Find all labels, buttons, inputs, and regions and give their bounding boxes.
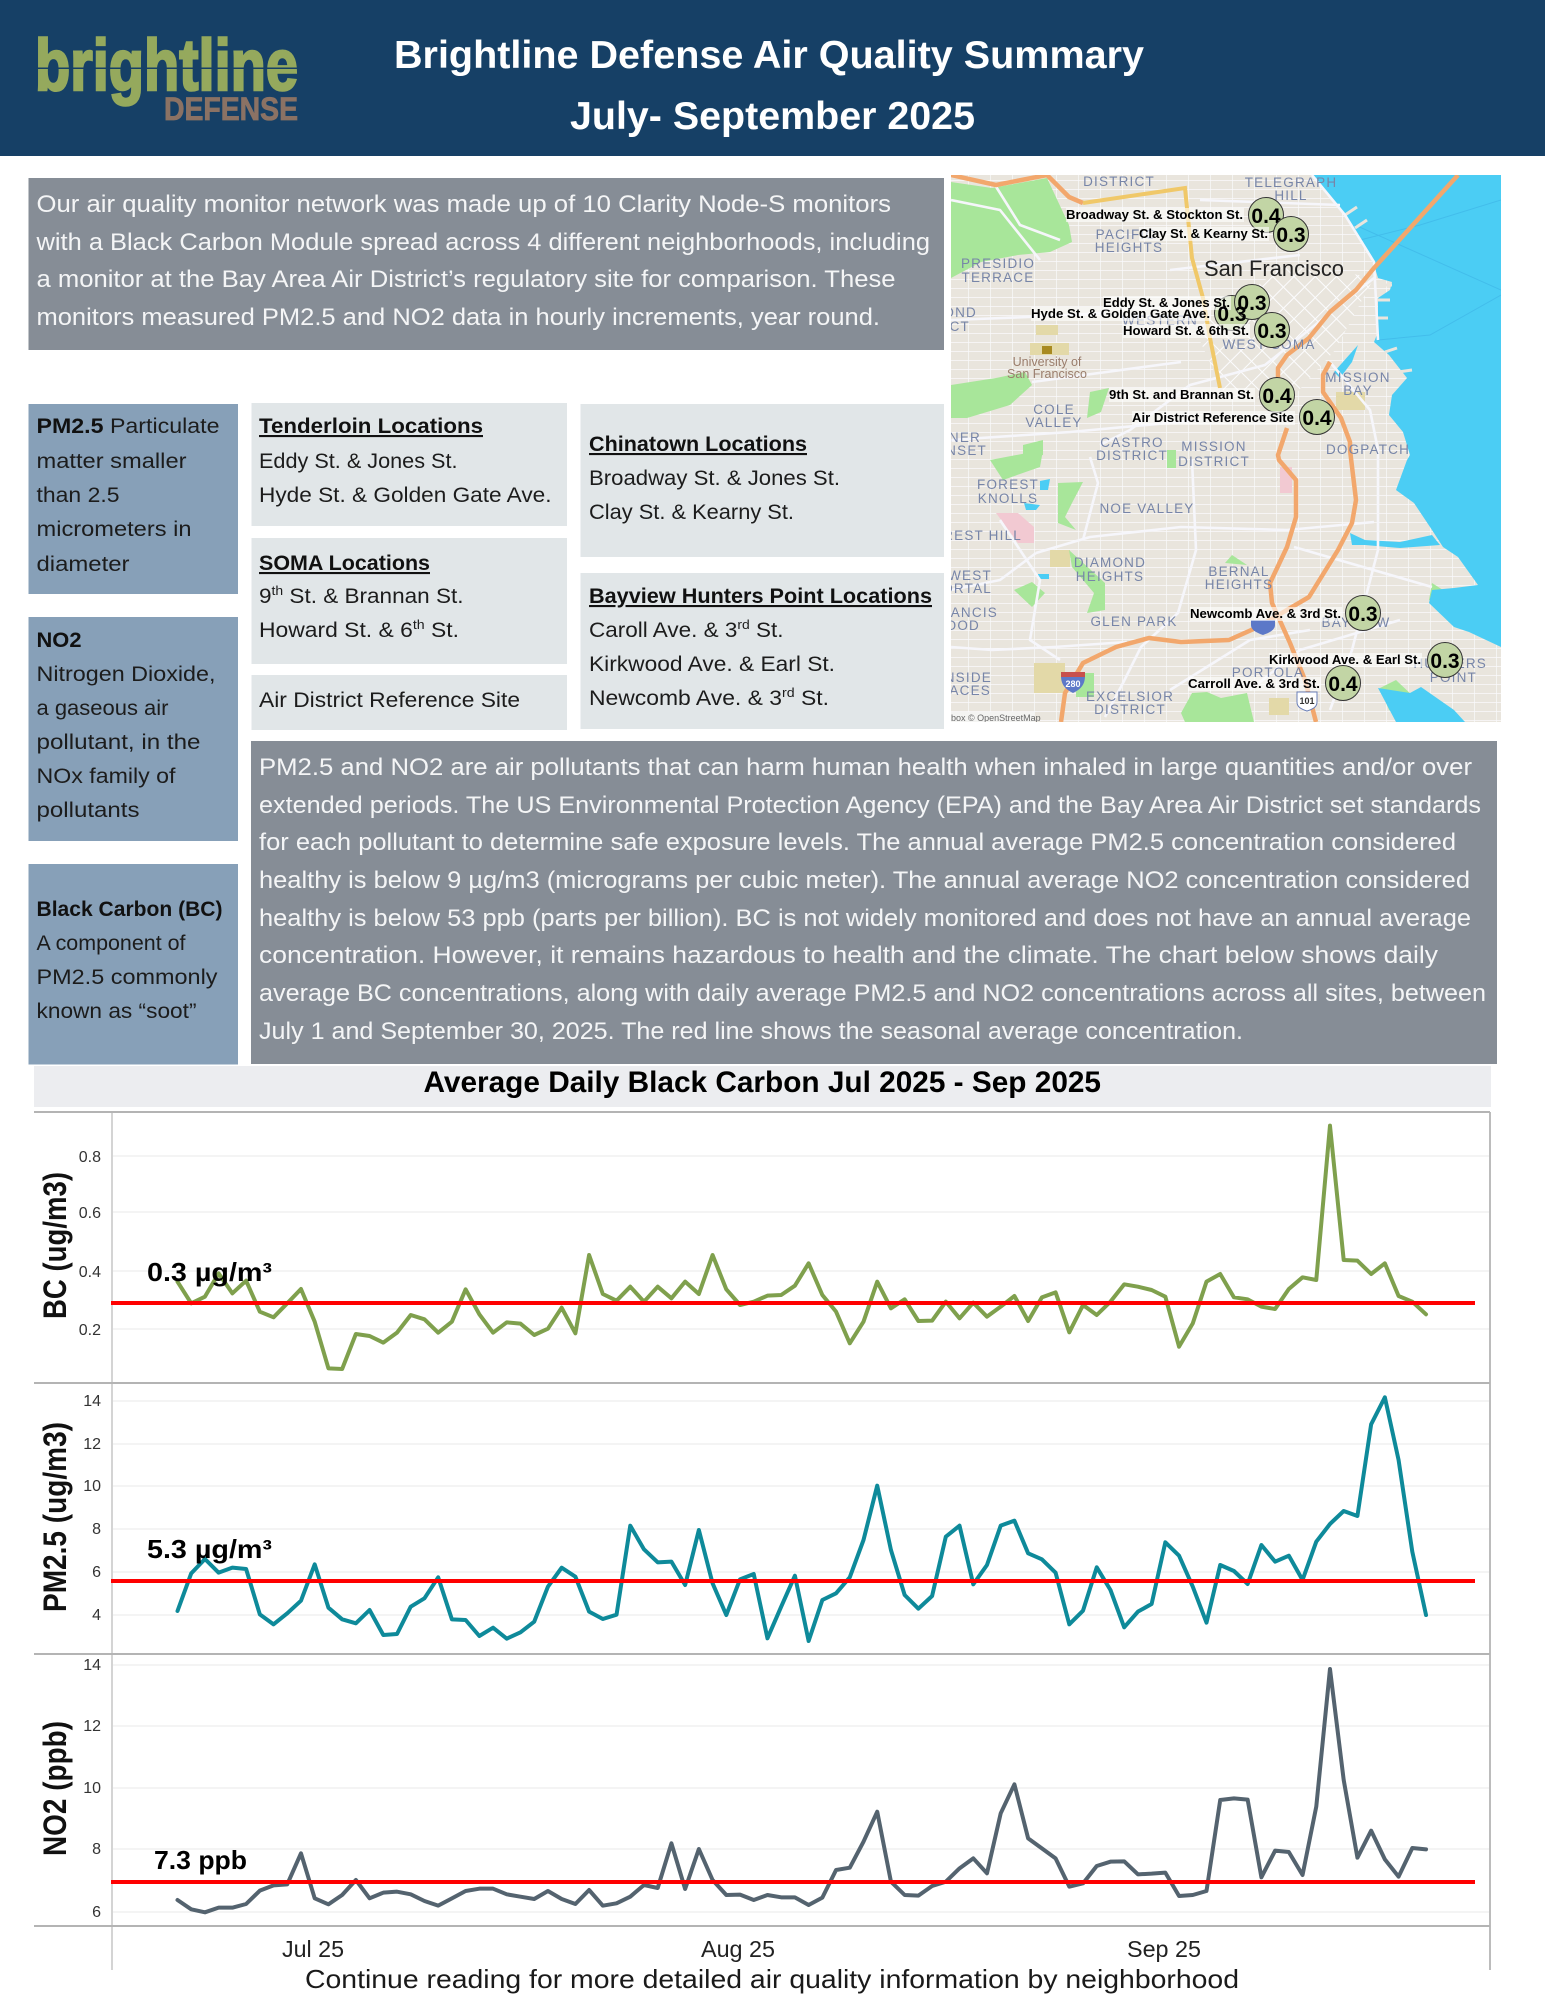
map neighborhood names: PORTOLA [1232,665,1304,680]
map neighborhood names: DISTRICT [1178,454,1250,469]
logo: brightline defense: DEFENSE [164,91,298,127]
panel: Black Carbon definition: A component of [36,932,186,955]
panel: PM2.5 definition: diameter [36,553,130,576]
line chart: black carbon [37,1126,1489,1369]
map neighborhood names: TERRACE [962,270,1034,285]
map marker: Newcomb Ave. & 3rd St.: Newcomb Ave. & 3rd St. [1190,606,1341,621]
axis title: BC: BC (ug/m3) [37,1172,73,1319]
panel: network intro: a monitor at the Bay Area Air District’s regulatory site for comparison. These [36,266,895,293]
panel: Bayview Hunters Point locations: Newcomb Ave. & 3 [589,687,766,710]
average line: PM2.5 [111,1579,1475,1583]
panel: Bayview Hunters Point locations: St. [750,619,784,642]
map neighborhood names: TERRACES [908,683,991,698]
panel: NO2 definition [28,617,238,841]
map marker: Kirkwood Ave. & Earl St.: Kirkwood Ave. & Earl St. [1269,652,1421,667]
panel: PM2.5 definition: PM2.5 Particulate [36,415,220,438]
footer note: Continue reading for more detailed air quality information by neighborhood [305,1964,1239,1994]
map neighborhood names: HILL [1274,188,1308,203]
panel: Bayview Hunters Point locations: Kirkwood Ave. & Earl St. [589,653,835,676]
panel: Black Carbon definition: known as “soot” [36,1000,197,1023]
map neighborhood names: FOREST [977,477,1039,492]
map neighborhood names: BERNAL [1208,564,1270,579]
map value: Hyde St. & Golden Gate Ave.: 0.3 [1217,303,1247,326]
line chart: NO2: 8 [92,1841,101,1858]
logo: brightline defense [35,26,298,127]
panel: network intro: Our air quality monitor network was made up of 10 Clarity Node-S monitors [36,191,891,218]
map neighborhood names: DOGPATCH [1326,442,1410,457]
map neighborhood names: SAINT FRANCIS [880,605,998,620]
title: Brightline Defense Air Quality Summary [394,34,1144,77]
panel: Tenderloin locations [252,403,567,526]
line chart: PM2.5: 12 [83,1436,101,1453]
map neighborhood names: WEST SOMA [1222,337,1316,352]
line chart: PM2.5: 10 [83,1478,101,1495]
x axis labels [282,1936,1201,1962]
map marker: 9th St. and Brannan St. [1109,378,1294,412]
panel: pollutant standards explanation: healthy is below 9 µg/m3 (micrograms per cubic meter). The annual average NO2 concentration considered [259,867,1470,894]
icon: highway shields [1061,620,1317,711]
panel: network intro [28,178,944,350]
panel: pollutant standards explanation: PM2.5 and NO2 are air pollutants that can harm human health when inhaled in large quantities and/or over [259,754,1472,781]
map neighborhood names: EXCELSIOR [1086,689,1174,704]
line chart: black carbon: 0.8 [79,1149,101,1166]
map neighborhood names: CASTRO [1100,435,1164,450]
average line: BC [111,1301,1475,1305]
map marker: Air District Reference Site [1132,400,1334,434]
map neighborhood names: SUNSET [925,443,987,458]
panel: Black Carbon definition: Black Carbon (BC) [36,898,222,921]
line chart: PM2.5 [37,1393,1489,1641]
panel: Black Carbon definition: PM2.5 commonly [36,966,218,989]
panel: NO2 definition: pollutants [36,799,140,822]
map neighborhood names: DIAMOND [1074,555,1146,570]
map marker: Carroll Ave. & 3rd St.: 0.4 [1328,673,1358,696]
panel: Air District reference site: Air District Reference Site [259,689,520,712]
map marker: Hyde St. & Golden Gate Ave. [1031,296,1250,330]
panel: Chinatown locations [580,404,944,557]
line chart: PM2.5: 6 [92,1564,101,1581]
panel: PM2.5 definition: micrometers in [36,518,192,541]
line chart: PM2.5: 4 [92,1607,101,1624]
map attribution: box © OpenStreetMap [951,713,1041,723]
map neighborhood names: DISTRICT [898,319,970,334]
map marker: Eddy St. & Jones St. [1103,284,1270,320]
panel: pollutant standards explanation: July 1 and September 30, 2025. The red line shows the seasonal average concentration. [259,1018,1243,1045]
panel: Bayview Hunters Point locations: rd [782,685,795,700]
map marker: Broadway St. & Stockton St.: 0.4 [1251,205,1281,228]
map neighborhood names: San Francisco [1204,256,1344,281]
x axis labels: Jul 25 [282,1936,344,1962]
title: July- September 2025 [570,95,975,138]
panel: Bayview Hunters Point locations: rd [737,617,750,632]
panel: Tenderloin locations: Eddy St. & Jones St. [259,450,458,473]
map marker: Howard St. & 6th St.: 0.3 [1257,320,1287,343]
map marker: Clay St. & Kearny St.: 0.3 [1276,224,1306,247]
map marker: Newcomb Ave. & 3rd St.: 0.3 [1348,603,1378,626]
panel: network intro: with a Black Carbon Module spread across 4 different neighborhoods, including [35,229,930,256]
map neighborhood names: RICHMOND [893,305,977,320]
panel: Air District reference site [252,675,567,730]
map of monitor sites [951,175,1501,722]
map neighborhood names: NOE VALLEY [1099,501,1195,516]
panel: Chinatown locations: Clay St. & Kearny St. [589,501,794,524]
panel: SOMA locations: th [413,617,425,632]
panel: network intro: monitors measured PM2.5 and NO2 data in hourly increments, year round. [36,304,880,331]
panel: Chinatown locations: Broadway St. & Jones St. [589,467,840,490]
data line: PM2.5 daily average [178,1397,1426,1641]
map neighborhood names: GLEN PARK [1090,614,1178,629]
map neighborhood names: OCEANSIDE [902,670,992,685]
map marker: Howard St. & 6th St. [1123,312,1290,348]
line chart: NO2: 12 [83,1718,101,1735]
chart title [34,1066,1491,1107]
panel: Black Carbon definition [28,864,238,1064]
map neighborhood names: PORTAL [932,581,992,596]
icon: highway shields: 280 [1065,679,1081,689]
chart frame [34,1112,1490,1970]
map neighborhood names: DISTRICT [1096,448,1168,463]
panel: NO2 definition: NO2 [36,629,82,652]
panel: PM2.5 definition [28,404,238,594]
icon: highway shields: 101 [1299,696,1315,706]
panel: Bayview Hunters Point locations [580,573,944,729]
line chart: black carbon: 0.4 [79,1264,101,1281]
logo: brightline defense: brightline [35,26,298,106]
map neighborhood names [951,176,1486,714]
map marker: Air District Reference Site: 0.4 [1302,407,1332,430]
map neighborhood names: DISTRICT [1094,702,1166,717]
map neighborhood names: HEIGHTS [1095,240,1163,255]
panel: Bayview Hunters Point locations: St. [795,687,829,710]
panel: pollutant standards explanation: extended periods. The US Environmental Protection Agency (EPA) and the Bay Area Air District set standards [259,792,1481,819]
panel: SOMA locations: Howard St. & 6 [259,619,400,642]
line chart: black carbon: 0.2 [79,1322,101,1339]
map neighborhood names: FOREST HILL [922,528,1022,543]
map neighborhood names: TELEGRAPH [1245,175,1337,190]
panel: Tenderloin locations: Tenderloin Locations [259,415,483,438]
panel: Bayview Hunters Point locations: Bayview Hunters Point Locations [589,585,932,608]
map neighborhood names: PRESIDIO [961,256,1035,271]
line chart: NO2 [37,1657,1489,1921]
panel: pollutant standards explanation: for each pollutant to determine safe exposure levels. The annual average PM2.5 concentration considered [259,829,1456,856]
map marker: 9th St. and Brannan St.: 0.4 [1262,385,1292,408]
map marker: Eddy St. & Jones St.: Eddy St. & Jones St. [1103,295,1230,310]
map marker: Broadway St. & Stockton St.: Broadway St. & Stockton St. [1066,207,1243,222]
chart title: Average Daily Black Carbon Jul 2025 - Sep 2025 [424,1066,1101,1099]
panel: SOMA locations: St. & Brannan St. [283,585,464,608]
panel: NO2 definition: Nitrogen Dioxide, [36,663,216,686]
map marker: Kirkwood Ave. & Earl St. [1269,642,1462,678]
panel: pollutant standards explanation [251,741,1497,1064]
panel: PM2.5 definition: than 2.5 [36,484,120,507]
panel: pollutant standards explanation: average BC concentrations, along with daily average PM2.5 and NO2 concentrations across all sites, between [259,980,1486,1007]
map neighborhood names: WEST [948,568,992,583]
map marker: Newcomb Ave. & 3rd St. [1190,596,1380,630]
map neighborhood names: DISTRICT [1083,174,1155,189]
map marker: 9th St. and Brannan St.: 9th St. and Brannan St. [1109,387,1254,402]
panel: NO2 definition: NOx family of [36,765,176,788]
panel: Bayview Hunters Point locations: Caroll Ave. & 3 [589,619,728,642]
map neighborhood names: University of [1013,355,1082,369]
line chart: NO2: 14 [83,1657,101,1674]
map marker: Carroll Ave. & 3rd St. [1188,666,1360,700]
panel: SOMA locations [252,538,567,664]
panel: SOMA locations: St. [425,619,459,642]
map marker: Hyde St. & Golden Gate Ave.: Hyde St. & Golden Gate Ave. [1031,306,1210,321]
map neighborhood names: COLE [1033,402,1075,417]
map neighborhood names: KNOLLS [978,491,1038,506]
panel: NO2 definition: pollutant, in the [36,731,200,754]
map neighborhood names: HEIGHTS [1205,577,1273,592]
map neighborhood names: BAY [1343,383,1373,398]
line chart: black carbon: 0.6 [79,1205,101,1222]
line chart: PM2.5: 8 [92,1521,101,1538]
map marker: Broadway St. & Stockton St. [1066,198,1284,232]
panel: SOMA locations: SOMA Locations [259,552,430,575]
panel: NO2 definition: a gaseous air [36,697,168,720]
map marker: Eddy St. & Jones St.: 0.3 [1237,292,1267,315]
annotation: NO2 average: 7.3 ppb [154,1845,247,1875]
annotation: PM2.5 average: 5.3 µg/m³ [147,1534,272,1564]
x axis labels: Aug 25 [701,1936,775,1962]
panel: SOMA locations: th [272,583,283,598]
panel: Chinatown locations: Chinatown Locations [589,433,807,456]
panel: SOMA locations: 9 [259,585,271,608]
map neighborhood names: WESTERN [1122,313,1198,328]
x axis labels: Sep 25 [1127,1936,1201,1962]
annotation: BC average: 0.3 µg/m³ [147,1257,272,1287]
map neighborhood names: MISSION [1325,370,1391,385]
title [394,34,1144,138]
map marker: Howard St. & 6th St.: Howard St. & 6th St. [1123,323,1249,338]
axis title: NO2: NO2 (ppb) [37,1721,73,1856]
line chart: NO2: 6 [92,1904,101,1921]
map marker: Clay St. & Kearny St. [1139,216,1308,252]
map neighborhood names: WOOD [932,618,980,633]
header banner [0,0,1545,156]
map marker: Kirkwood Ave. & Earl St.: 0.3 [1430,650,1460,673]
map neighborhood names: BAYVIEW [1322,615,1390,630]
map neighborhood names: POINT [1430,670,1477,685]
axis title: PM2.5: PM2.5 (ug/m3) [37,1422,73,1612]
map neighborhood names: HUNTERS [1413,656,1487,671]
data line: NO2 daily average [178,1669,1426,1912]
data line: BC daily average [178,1126,1426,1369]
panel: PM2.5 definition: matter smaller [36,450,186,473]
map neighborhood names: San Francisco [1007,367,1087,381]
average line: NO2 [111,1880,1475,1884]
panel: Tenderloin locations: Hyde St. & Golden Gate Ave. [259,484,552,507]
map neighborhood names: INNER [933,430,981,445]
map neighborhood names: HEIGHTS [1076,569,1144,584]
line chart: PM2.5: 14 [83,1393,101,1410]
line chart: NO2: 10 [83,1780,101,1797]
map marker: Carroll Ave. & 3rd St.: Carroll Ave. & 3rd St. [1188,676,1320,691]
map neighborhood names: PACIFIC [1096,227,1156,242]
map neighborhood names: MISSION [1181,439,1247,454]
panel: pollutant standards explanation: concentration. However, it remains hazardous to health and the climate. The chart below shows daily [259,942,1438,969]
map marker: Clay St. & Kearny St.: Clay St. & Kearny St. [1139,226,1268,241]
map neighborhood names: VALLEY [1025,415,1083,430]
panel: pollutant standards explanation: healthy is below 53 ppb (parts per billion). BC is not widely monitored and does not have an annual average [259,905,1471,932]
map marker: Air District Reference Site: Air District Reference Site [1132,410,1294,425]
